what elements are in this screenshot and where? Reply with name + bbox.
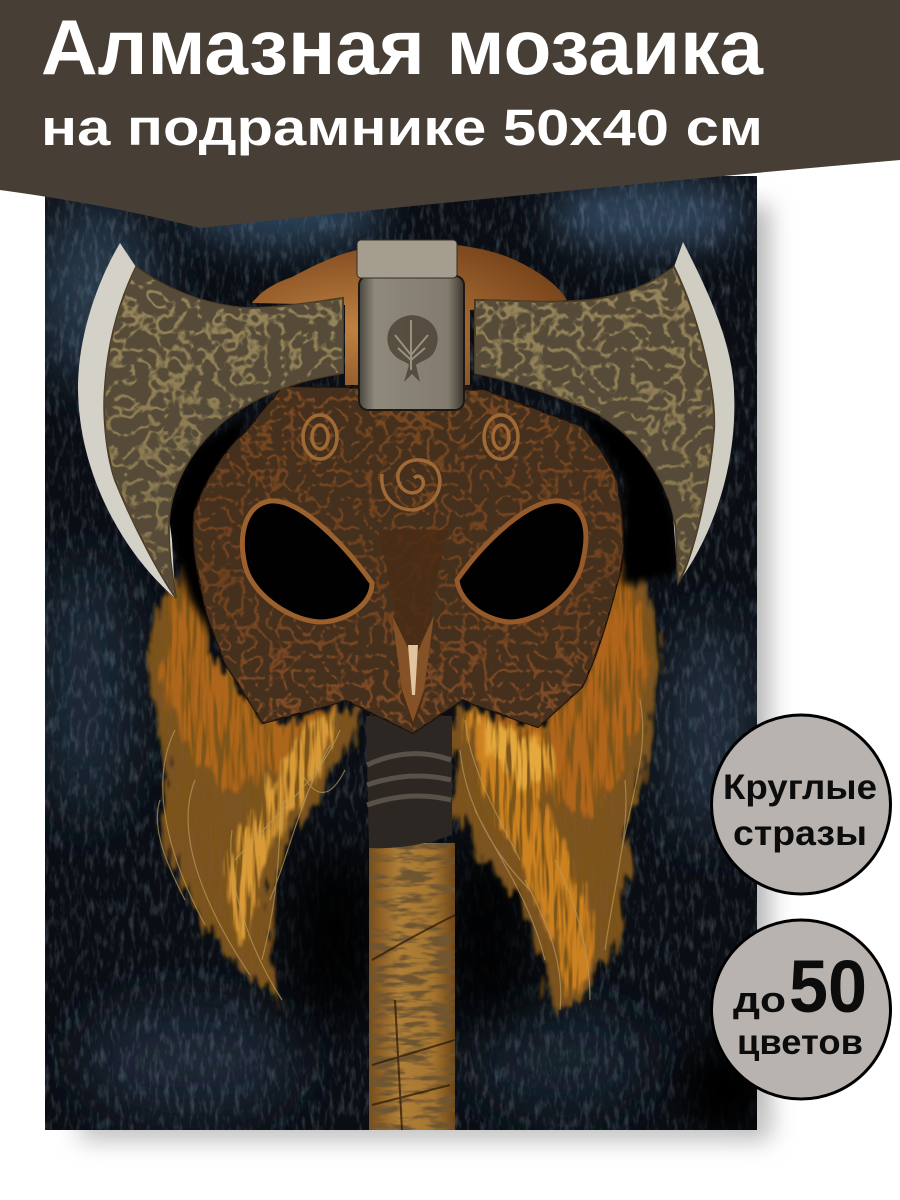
fur background [35, 176, 770, 1140]
subtitle: на подрамнике 50х40 см [41, 99, 763, 156]
right eye [457, 501, 586, 622]
beard left [149, 535, 361, 1006]
axe blades [78, 242, 734, 598]
badge: round rhinestones [712, 715, 890, 894]
mask [190, 380, 630, 740]
central strap [357, 240, 464, 410]
spiral ornament [303, 415, 518, 510]
badge: up to 50 colours: цветов [737, 1023, 863, 1062]
header banner [0, 0, 900, 228]
badge: round rhinestones: стразы [733, 814, 867, 853]
badge: up to 50 colours: 50 [789, 945, 867, 1028]
left eye [242, 501, 372, 622]
helmet dome [252, 245, 567, 385]
badge: up to 50 colours: до [733, 979, 786, 1020]
canvas side edge and shadow [80, 205, 770, 1140]
painting: viking mask and axe on dark fur [35, 176, 770, 1140]
badge: up to 50 colours [712, 920, 890, 1099]
beard right [451, 545, 661, 1017]
badge: round rhinestones: Круглые [723, 768, 877, 807]
title: Алмазная мозаика [41, 3, 764, 91]
tree emblem [387, 315, 438, 382]
beard strands right [460, 700, 643, 1010]
axe handle [366, 716, 455, 1135]
beard strands left [157, 730, 345, 1000]
dark gaps behind axe arch [165, 405, 676, 640]
nose guard [378, 530, 448, 730]
